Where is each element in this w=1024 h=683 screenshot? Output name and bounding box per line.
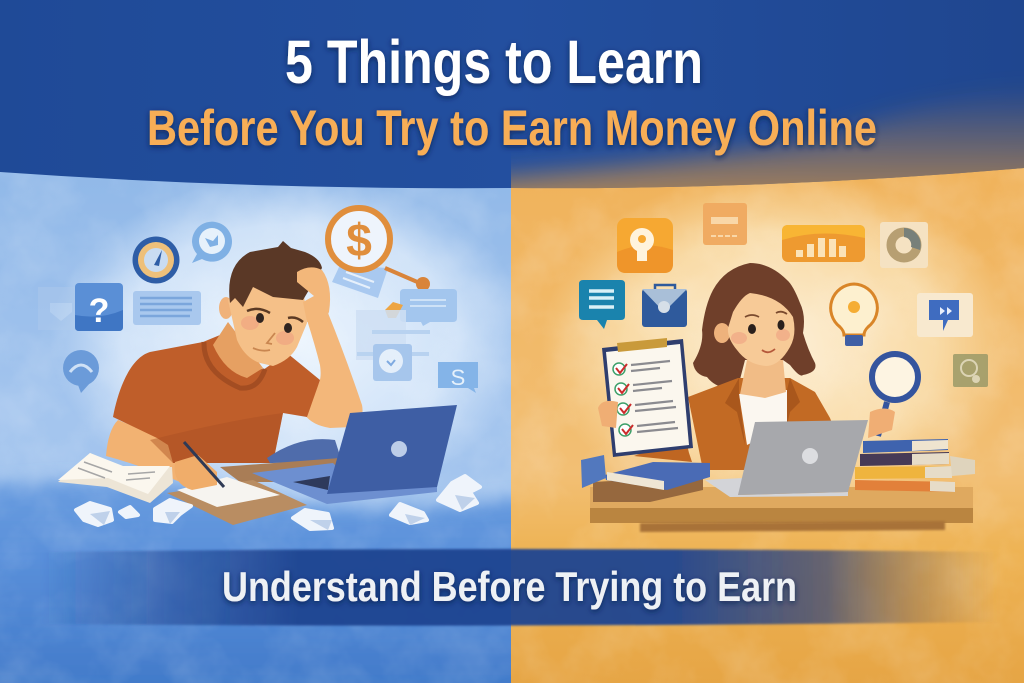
man: cheeks	[241, 316, 294, 345]
icon: question tile: ?	[89, 292, 109, 330]
icon: dollar magnifier: $	[346, 214, 372, 266]
man: hair	[229, 241, 322, 307]
title line 1: 5 Things to Learn	[285, 28, 703, 96]
icon: envelope tile	[38, 287, 72, 321]
icon: S bubble	[438, 362, 478, 393]
laptop	[252, 405, 457, 504]
man: shirt shading	[150, 413, 283, 463]
background: left blue panel	[0, 160, 540, 683]
woman: jacket	[688, 378, 850, 470]
icon: chat bubble	[192, 222, 232, 263]
right scene: prepared learner	[579, 203, 988, 532]
open book	[58, 453, 173, 503]
clipboard	[602, 338, 693, 457]
right book stack	[855, 439, 975, 492]
icon: bar chart tile	[782, 225, 865, 262]
paper shading	[90, 495, 475, 530]
man: right arm	[305, 313, 363, 428]
icon: briefcase	[642, 285, 687, 327]
background: right orange panel	[511, 160, 1024, 683]
icon: question tile	[75, 283, 123, 331]
notebook	[177, 477, 280, 507]
brown board	[167, 480, 307, 525]
woman: neck	[740, 360, 786, 398]
man: left arm	[106, 420, 180, 482]
woman: right hand	[868, 408, 895, 438]
woman: left hand	[598, 401, 618, 428]
woman: cheeks	[731, 329, 790, 344]
woman: ear	[714, 323, 730, 343]
icon: teal chat	[579, 280, 625, 329]
desk	[590, 487, 973, 532]
man: shirt	[113, 335, 320, 463]
small phone stand	[581, 455, 606, 488]
desk	[220, 458, 340, 482]
woman: jacket lapels	[725, 378, 800, 445]
woman: hair back	[693, 263, 816, 391]
bottom banner	[40, 549, 1000, 626]
title line 2: Before You Try to Earn Money Online	[147, 100, 877, 156]
man: neck	[213, 322, 263, 378]
icon: bulb tile	[617, 218, 673, 273]
left scene: overwhelmed learner	[38, 208, 480, 530]
woman: face	[728, 293, 794, 366]
icon: clock	[132, 236, 180, 284]
checklist rows	[613, 361, 678, 436]
icon: phone bubble	[63, 350, 99, 393]
icon: note behind magnifier	[332, 265, 388, 298]
man: sweater on desk	[267, 439, 342, 463]
icon: S bubble: S	[451, 365, 465, 390]
icon: donut tile	[880, 222, 928, 268]
icon: small image tile	[953, 354, 988, 387]
woman: eyes and mouth	[745, 312, 787, 352]
top banner	[0, 0, 1024, 188]
icon: document tile	[703, 203, 747, 245]
icon: text list	[133, 291, 201, 325]
crumpled papers	[76, 476, 480, 529]
bottom banner text: Understand Before Trying to Earn	[222, 563, 797, 610]
man: eyes and mouth	[247, 309, 303, 351]
woman: jacket sleeve	[634, 397, 692, 462]
icon: message bubble	[400, 289, 457, 326]
icon: dollar magnifier	[328, 208, 430, 291]
icon: checklist box	[356, 310, 430, 381]
man: shirt collar	[204, 342, 265, 388]
man: face	[228, 285, 307, 366]
man: ear	[219, 297, 232, 319]
icon: light bulb	[831, 284, 877, 346]
icon: blue chat tile	[917, 293, 973, 337]
laptop	[705, 420, 868, 497]
magnifier	[872, 354, 918, 436]
hand and pen	[175, 442, 224, 490]
left book stack	[593, 462, 710, 502]
icon: orange check	[385, 302, 403, 318]
woman: white shirt	[739, 390, 787, 445]
man: hand on head	[297, 267, 330, 322]
